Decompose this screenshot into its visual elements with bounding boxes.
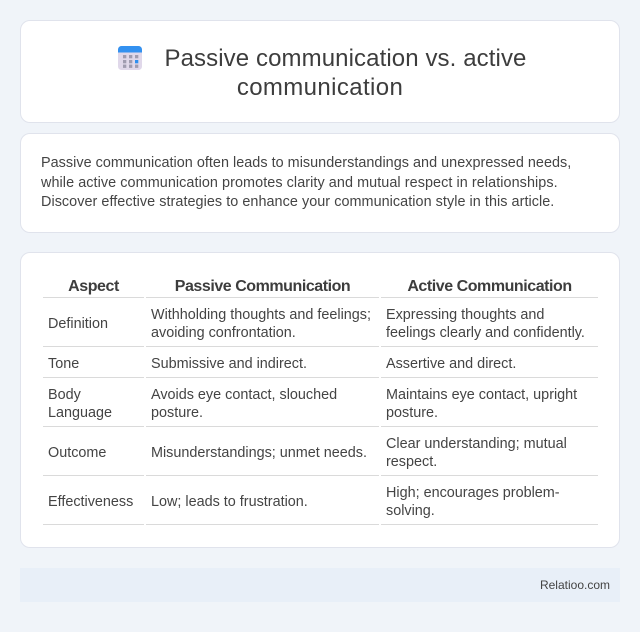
row: outcome [48,436,567,470]
row: tone: Assertive and direct. [386,356,516,372]
title: Passive communication vs. active [164,45,526,72]
row: body language [48,387,578,421]
icon: calendar [118,46,142,70]
row: effectiveness: High; encourages problem- [386,485,560,501]
footer bar [20,568,620,602]
row: tone: Submissive and indirect. [151,356,307,372]
row: outcome: respect. [386,454,437,470]
intro text: Passive communication often leads to misunderstandings and unexpressed needs, [41,155,571,171]
row: body language: Avoids eye contact, slouched [151,387,337,403]
row: definition: Withholding thoughts and feelings; [151,307,371,323]
header row [68,278,572,295]
row: outcome: Clear understanding; mutual [386,436,567,452]
title: communication [237,74,403,101]
intro text: Discover effective strategies to enhance your communication style in this article. [41,194,554,210]
row: body language: Body [48,387,81,403]
row: effectiveness: Effectiveness [48,494,133,510]
title [164,45,526,101]
intro text: while active communication promotes clarity and mutual respect in relationships. [41,174,558,190]
row: definition: Definition [48,316,108,332]
header row: Active Communication [407,278,572,295]
header row: Aspect [68,278,119,295]
row: outcome: Misunderstandings; unmet needs. [151,445,367,461]
row: body language: Language [48,405,112,421]
row: tone [48,356,516,372]
row: body language: posture. [386,405,438,421]
row: effectiveness: Low; leads to frustration. [151,494,308,510]
row: definition: feelings clearly and confidently. [386,325,585,341]
row: outcome: Outcome [48,445,106,461]
row: definition: Expressing thoughts and [386,307,544,323]
row: definition: avoiding confrontation. [151,325,296,341]
row: effectiveness: solving. [386,503,435,519]
intro text [41,155,571,210]
panel: introduction [20,133,620,233]
row: body language: Maintains eye contact, upright [386,387,577,403]
row: effectiveness [48,485,560,519]
panel: comparison table [20,252,620,548]
table [43,278,598,525]
row: tone: Tone [48,356,79,372]
row: body language: posture. [151,405,203,421]
row: definition [48,307,585,341]
panel: title card [20,20,620,123]
header row: Passive Communication [175,278,350,295]
footer text: Relatioo.com [540,578,610,592]
